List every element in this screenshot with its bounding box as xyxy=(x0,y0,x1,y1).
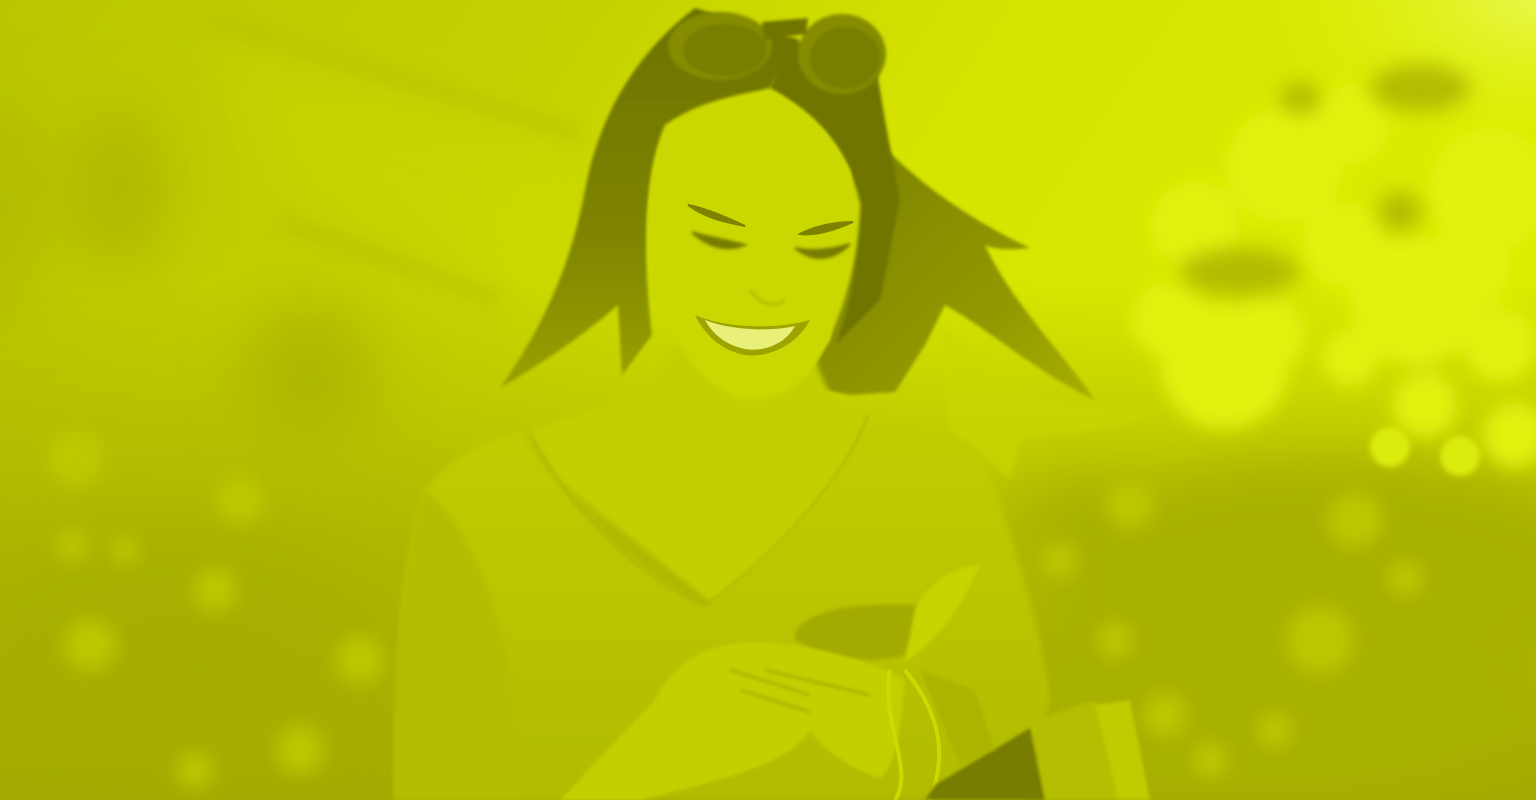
neckline strokes xyxy=(530,415,868,605)
corner glow xyxy=(1000,0,1536,300)
shopping bag handles xyxy=(888,670,939,800)
hair main left xyxy=(500,8,800,388)
torso sweater xyxy=(395,412,1050,800)
blown light hair xyxy=(940,320,1165,480)
bright bokeh right xyxy=(1132,85,1536,467)
woman xyxy=(395,8,1165,800)
dark gaps in bokeh xyxy=(1180,64,1470,296)
flying hair strand xyxy=(800,120,1095,400)
teeth xyxy=(705,320,795,350)
finger lines xyxy=(730,670,870,712)
small bokeh xyxy=(1370,427,1480,476)
blurred foliage right xyxy=(970,460,1536,800)
hair top right xyxy=(770,40,900,345)
eyebrows xyxy=(688,205,853,234)
face xyxy=(648,92,860,400)
neck and chest xyxy=(530,340,950,610)
sweater sleeve shade xyxy=(395,490,520,800)
nose shadow xyxy=(750,290,785,304)
eyes xyxy=(692,232,850,258)
light building wall xyxy=(210,40,575,300)
phone xyxy=(795,565,980,662)
sunglasses xyxy=(668,12,886,94)
hands xyxy=(560,642,905,800)
shopping bags xyxy=(920,670,1150,800)
soft bokeh lower xyxy=(48,430,1423,788)
smile xyxy=(695,315,810,356)
building edges xyxy=(210,20,580,300)
blurred foliage left xyxy=(0,90,400,790)
lower background shade xyxy=(0,280,1536,800)
